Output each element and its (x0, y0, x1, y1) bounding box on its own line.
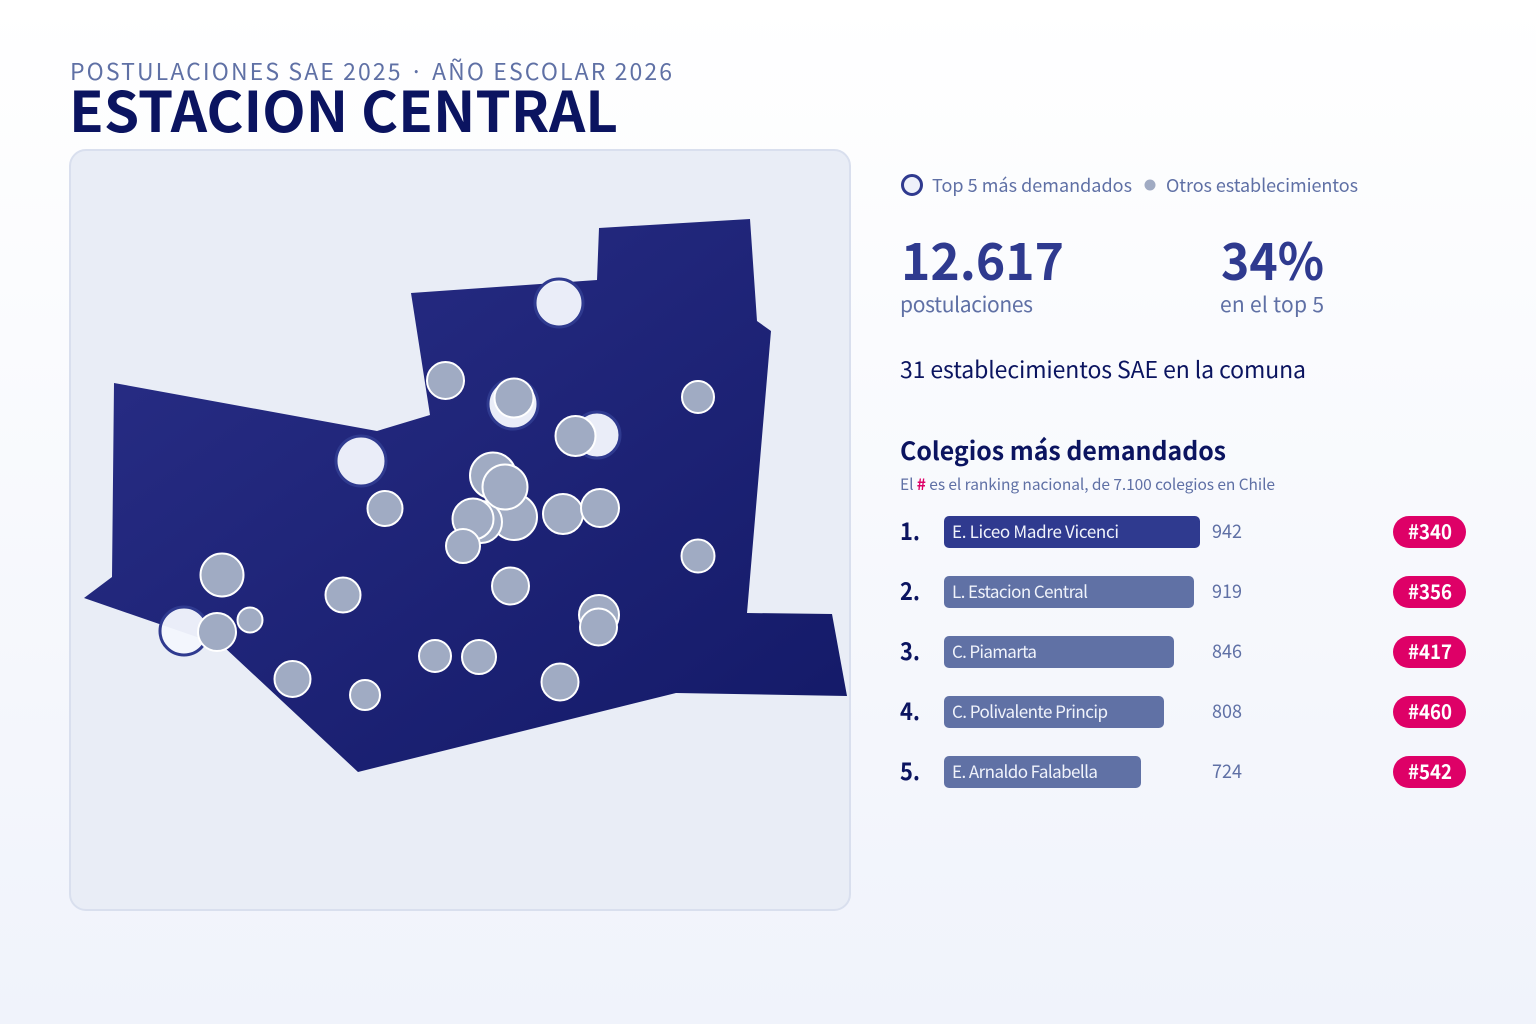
ranking row 4 (900, 692, 1466, 728)
map: commune shape (84, 219, 847, 772)
map: schools overlapping top 5 (198, 378, 596, 651)
legend: top 5 label: Top 5 más demandados (932, 172, 1132, 198)
ranking row 1: #340 (1408, 516, 1452, 545)
title: ESTACION CENTRAL (69, 68, 618, 149)
eyebrow heading: POSTULACIONES SAE 2025 · AÑO ESCOLAR 2026 (70, 53, 672, 87)
legend (902, 172, 1358, 198)
ranking row 5: E. Arnaldo Falabella (952, 758, 1098, 783)
ranking row 3: 3. (900, 632, 920, 667)
ranking row 4: #460 (1408, 696, 1452, 725)
stat: top 5 share: 34% (1221, 221, 1324, 295)
ranking row 5: 5. (900, 752, 920, 787)
ranking row 3 (900, 632, 1466, 668)
ranking row 5: #542 (1408, 756, 1452, 785)
ranking row 1 (900, 512, 1466, 548)
ranking row 2: #356 (1408, 576, 1452, 605)
ranking row 3: 846 (1212, 637, 1242, 664)
map: other schools (200, 362, 714, 710)
establishments count: 31 establecimientos SAE en la comuna (900, 351, 1306, 385)
ranking row 3: #417 (1408, 636, 1452, 665)
ranking row 5 (900, 752, 1466, 788)
ranking row 2: 2. (900, 572, 920, 607)
ranking row 5: 724 (1212, 757, 1242, 784)
ranking row 1: E. Liceo Madre Vicenci (952, 518, 1119, 543)
ranking row 3: C. Piamarta (952, 638, 1037, 663)
ranking row 1: 1. (900, 512, 920, 547)
ranking row 2: 919 (1212, 577, 1242, 604)
ranking note: El # es el ranking nacional, de 7.100 colegios en Chile (900, 473, 1275, 495)
ranking heading: Colegios más demandados (900, 432, 1226, 468)
legend: top 5 marker (902, 176, 922, 194)
ranking row 4: 4. (900, 692, 920, 727)
ranking row 2: L. Estacion Central (952, 578, 1088, 603)
stat: applications: postulaciones (900, 289, 1033, 319)
stat: applications: 12.617 (901, 221, 1064, 295)
ranking row 1: 942 (1212, 517, 1242, 544)
panel: map (70, 150, 850, 910)
ranking row 2 (900, 572, 1466, 608)
map: top 5 schools (160, 279, 620, 655)
legend: others label: Otros establecimientos (1166, 172, 1358, 198)
stat: top 5 share: en el top 5 (1220, 289, 1324, 319)
legend: others marker (1144, 180, 1156, 190)
ranking row 4: C. Polivalente Princip (952, 698, 1108, 723)
ranking row 4: 808 (1212, 697, 1242, 724)
